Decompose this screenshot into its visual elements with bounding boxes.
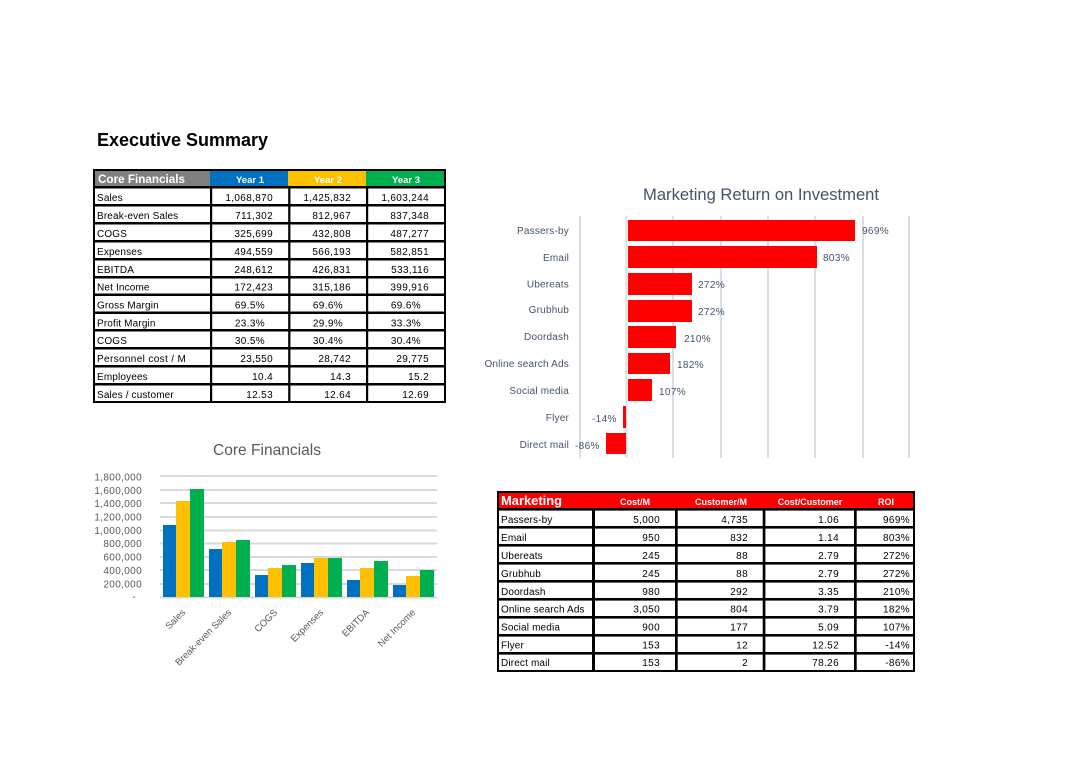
table rows: marketing values: 153	[642, 640, 660, 652]
table rows: core financials values: Sales	[97, 193, 123, 204]
title: Executive Summary: Executive Summary	[97, 130, 268, 150]
y axis labels: -	[132, 592, 136, 603]
table rows: core financials values: 12.53	[246, 390, 273, 401]
table rows: core financials values: 812,967	[312, 211, 351, 222]
ROI value labels: 210%	[684, 334, 711, 345]
table rows: marketing values: 3.79	[818, 604, 839, 616]
table rows: marketing values: 5.09	[818, 622, 839, 634]
table rows: core financials values: 711,302	[235, 211, 273, 222]
channel labels	[484, 226, 569, 451]
table rows: core financials values: 14.3	[330, 372, 351, 383]
table rows: core financials values: 487,277	[390, 229, 429, 240]
x axis category labels: Net Income	[376, 607, 418, 649]
table rows: marketing values: 12	[736, 640, 748, 652]
table rows: core financials values: 28,742	[318, 354, 351, 365]
table header row: marketing: Cost/Customer	[778, 497, 843, 507]
table rows: core financials values: 10.4	[252, 372, 273, 383]
channel labels: Ubereats	[527, 280, 569, 290]
table rows: marketing values: 950	[642, 533, 660, 544]
chart title: core financials: Core Financials	[213, 442, 321, 459]
table rows: core financials values: 29.9%	[313, 318, 343, 330]
table rows: marketing values: 832	[730, 533, 748, 544]
table rows: core financials values: Profit Margin	[97, 318, 156, 330]
table rows: core financials values: 69.5%	[235, 300, 265, 312]
ROI value labels: 969%	[862, 226, 889, 237]
table header row: core financials: Core Financials	[98, 172, 185, 186]
x axis category labels	[164, 607, 418, 668]
table rows: marketing values: 2	[742, 658, 748, 669]
table rows: core financials values: 582,851	[390, 247, 429, 258]
table rows: marketing values: 12.52	[812, 640, 839, 652]
table rows: core financials values: 69.6%	[391, 300, 421, 312]
table rows: marketing values	[501, 515, 910, 669]
table rows: core financials values: 426,831	[312, 265, 351, 276]
table rows: marketing values: 78.26	[812, 658, 839, 669]
bars: year 1	[163, 525, 406, 597]
table rows: core financials values: 837,348	[390, 211, 429, 222]
table rows: marketing values: 1.14	[818, 533, 839, 544]
bars: ROI by channel	[606, 220, 855, 454]
table rows: core financials values: Expenses	[97, 247, 142, 258]
ROI value labels: 182%	[677, 360, 704, 371]
x axis category labels: COGS	[253, 607, 280, 635]
table rows: core financials values: Sales / customer	[97, 390, 174, 401]
y axis labels: 1,600,000	[94, 486, 142, 497]
table rows: marketing values: Ubereats	[501, 551, 543, 562]
table rows: marketing values: 4,735	[721, 515, 748, 526]
table rows: core financials values: 69.6%	[313, 300, 343, 312]
table rows: marketing values: 804	[730, 604, 748, 616]
ROI value labels: 803%	[823, 253, 850, 264]
y axis labels: 200,000	[103, 580, 142, 590]
ROI value labels: 272%	[698, 307, 725, 318]
ROI value labels: 272%	[698, 280, 725, 291]
table rows: marketing values: 245	[642, 551, 660, 562]
table rows: marketing values: 210%	[883, 587, 910, 598]
table rows: marketing values: 245	[642, 569, 660, 580]
table rows: marketing values: -14%	[885, 640, 910, 652]
table rows: marketing values: 182%	[883, 604, 910, 616]
y axis labels: 1,000,000	[94, 526, 142, 537]
table header row: marketing: Customer/M	[695, 497, 747, 507]
channel labels: Flyer	[546, 413, 569, 424]
table rows: marketing values: Passers-by	[501, 515, 553, 526]
channel labels: Email	[543, 253, 569, 264]
table: core financials	[93, 169, 446, 403]
table rows: core financials values: Employees	[97, 372, 148, 383]
channel labels: Doordash	[524, 332, 569, 343]
table rows: marketing values: -86%	[885, 658, 910, 669]
table rows: core financials values: COGS	[97, 229, 127, 240]
table rows: core financials values: 23.3%	[235, 318, 265, 330]
table rows: marketing values: Flyer	[501, 640, 524, 652]
table rows: marketing values: 107%	[883, 622, 910, 634]
x axis category labels: Sales	[164, 607, 188, 632]
table rows: marketing values: 88	[736, 551, 748, 562]
table rows: marketing values: 292	[730, 587, 748, 598]
table rows: core financials values: 494,559	[234, 247, 273, 258]
table rows: core financials values: 30.4%	[313, 336, 343, 347]
y axis labels: 1,400,000	[94, 499, 142, 510]
ROI value labels: -86%	[575, 441, 600, 452]
table rows: core financials values: 1,068,870	[225, 193, 273, 204]
y axis labels: 600,000	[103, 552, 142, 564]
table rows: core financials values: 533,116	[391, 265, 429, 276]
table header row: marketing: Marketing	[501, 493, 562, 508]
y axis labels	[94, 472, 142, 603]
table rows: core financials values: 29,775	[396, 354, 429, 365]
table header row: core financials	[95, 171, 444, 186]
y axis labels: 1,800,000	[94, 472, 142, 484]
y axis labels: 800,000	[103, 539, 142, 550]
table header row: core financials: Year 3	[392, 175, 420, 186]
table rows: core financials values: 15.2	[408, 372, 429, 383]
chart: core financials column chart	[94, 442, 437, 668]
table rows: core financials values: EBITDA	[97, 265, 134, 276]
table rows: core financials values: 325,699	[234, 229, 273, 240]
table rows: core financials values: Personnel cost / M	[97, 354, 186, 365]
table rows: marketing values: Doordash	[501, 587, 546, 598]
table rows: marketing values: 900	[642, 622, 660, 634]
table rows: core financials values: 566,193	[312, 247, 351, 258]
table rows: marketing values: Social media	[501, 622, 560, 634]
y axis labels: 1,200,000	[94, 512, 142, 524]
table rows: core financials values: 172,423	[234, 282, 273, 294]
table rows: marketing values: 1.06	[818, 515, 839, 526]
ROI value labels: 107%	[659, 387, 686, 398]
table rows: marketing values: Direct mail	[501, 658, 550, 669]
table rows: marketing values: 3,050	[633, 604, 660, 616]
table rows: marketing values: 177	[730, 622, 748, 634]
table rows: core financials values: 432,808	[312, 229, 351, 240]
table header row: marketing: ROI	[878, 497, 894, 507]
x axis category labels: Expenses	[289, 607, 326, 645]
table rows: core financials values: 30.4%	[391, 336, 421, 347]
table rows: core financials values: 1,603,244	[381, 193, 429, 204]
table rows: marketing values: 153	[642, 658, 660, 669]
table header row: core financials: Year 2	[314, 175, 342, 186]
table rows: core financials values: 30.5%	[235, 336, 265, 347]
chart title: marketing roi: Marketing Return on Investment	[643, 186, 879, 204]
table rows: core financials values: COGS	[97, 336, 127, 347]
table rows: marketing values: 803%	[883, 533, 910, 544]
channel labels: Passers-by	[517, 226, 569, 237]
table rows: core financials values: Net Income	[97, 282, 150, 294]
y axis labels: 400,000	[103, 566, 142, 577]
bars: year 2	[176, 501, 420, 597]
table rows: marketing values: 272%	[883, 569, 910, 580]
channel labels: Social media	[509, 386, 569, 397]
table rows: marketing values: 3.35	[818, 587, 839, 598]
x axis category labels: EBITDA	[340, 607, 373, 639]
table header row: marketing	[499, 493, 913, 508]
table rows: core financials values: 33.3%	[391, 318, 421, 330]
table rows: core financials values: 12.64	[324, 390, 351, 401]
chart: marketing return on investment bar chart	[484, 186, 909, 458]
table header row: core financials: Year 1	[236, 175, 265, 186]
channel labels: Online search Ads	[484, 359, 569, 370]
table header row: marketing: Cost/M	[620, 497, 650, 507]
table rows: core financials values	[97, 193, 429, 401]
table rows: core financials values: 12.69	[402, 390, 429, 401]
table rows: core financials values: 1,425,832	[303, 193, 351, 204]
table rows: core financials values: 248,612	[234, 265, 273, 276]
bars: year 3	[190, 489, 434, 597]
table rows: marketing values: 272%	[883, 551, 910, 562]
table rows: core financials values: 315,186	[312, 282, 351, 294]
x axis category labels: Break-even Sales	[173, 607, 234, 668]
table rows: marketing values: 980	[642, 587, 660, 598]
table rows: marketing values: Grubhub	[501, 569, 541, 580]
table rows: core financials values: Gross Margin	[97, 300, 159, 312]
channel labels: Direct mail	[520, 440, 569, 451]
ROI value labels	[575, 226, 889, 452]
table rows: marketing values: 88	[736, 569, 748, 580]
table rows: marketing values: 969%	[883, 515, 910, 526]
table rows: marketing values: Online search Ads	[501, 604, 585, 616]
table rows: core financials values: 23,550	[240, 354, 273, 365]
table rows: core financials values: Break-even Sales	[97, 211, 178, 222]
table rows: marketing values: 5,000	[633, 515, 660, 526]
table rows: marketing values: 2.79	[818, 551, 839, 562]
table rows: core financials values: 399,916	[390, 282, 429, 294]
table rows: marketing values: 2.79	[818, 569, 839, 580]
channel labels: Grubhub	[529, 305, 569, 316]
table rows: marketing values: Email	[501, 533, 527, 544]
ROI value labels: -14%	[592, 414, 617, 425]
table: marketing	[497, 491, 915, 672]
